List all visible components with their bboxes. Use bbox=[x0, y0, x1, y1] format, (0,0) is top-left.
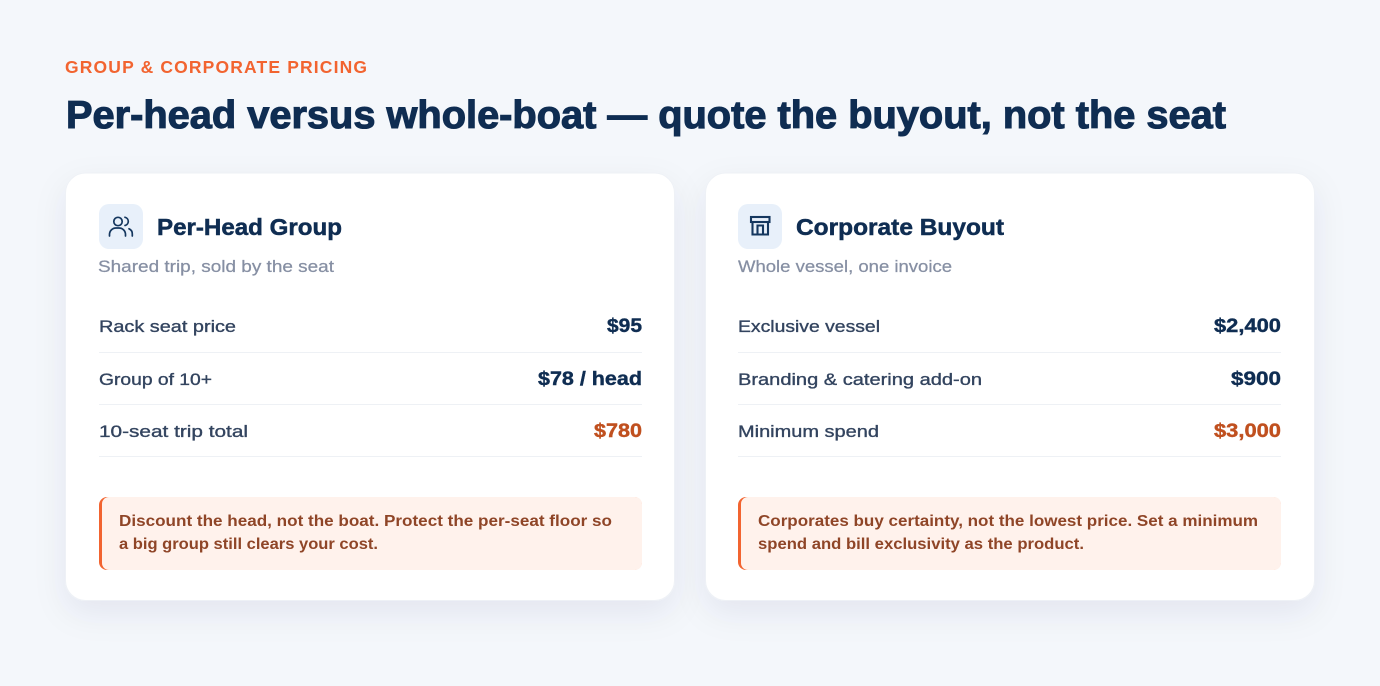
callout: Discount the head, not the boat. Protect the per-seat floor so bbox=[119, 513, 612, 530]
panel: per-head group bbox=[66, 173, 674, 600]
row: rack seat price: Rack seat price bbox=[99, 317, 236, 336]
row: exclusive vessel: Exclusive vessel bbox=[738, 317, 880, 336]
row: 10-seat trip total: 10-seat trip total bbox=[99, 422, 248, 441]
row: branding and catering: $900 bbox=[1231, 369, 1281, 390]
row: 10-seat trip total bbox=[99, 421, 642, 442]
callout bbox=[99, 497, 642, 570]
row: minimum spend bbox=[738, 421, 1281, 442]
callout: Corporates buy certainty, not the lowest price. Set a minimum bbox=[758, 513, 1258, 530]
card subtitle: Whole vessel, one invoice bbox=[738, 257, 952, 276]
row: group of 10+: $78 / head bbox=[538, 369, 642, 390]
card background bbox=[706, 173, 1314, 600]
title: Per-head versus whole-boat — quote the buyout, not the seat bbox=[66, 94, 1226, 137]
row: rack seat price: $95 bbox=[607, 316, 642, 337]
card heading: Per-Head Group bbox=[157, 214, 342, 240]
row: branding and catering: Branding & catering add-on bbox=[738, 370, 982, 389]
row: group of 10+ bbox=[99, 369, 642, 390]
row: exclusive vessel bbox=[738, 316, 1281, 337]
callout: a big group still clears your cost. bbox=[119, 536, 378, 553]
row: branding and catering bbox=[738, 369, 1281, 390]
row: minimum spend: $3,000 bbox=[1214, 421, 1281, 442]
row: minimum spend: Minimum spend bbox=[738, 422, 879, 441]
row: rack seat price bbox=[99, 316, 642, 337]
eyebrow heading: GROUP & CORPORATE PRICING bbox=[65, 57, 367, 77]
icon: storefront bbox=[738, 204, 782, 249]
card subtitle: Shared trip, sold by the seat bbox=[98, 257, 334, 276]
callout: spend and bill exclusivity as the product. bbox=[758, 536, 1084, 553]
row: 10-seat trip total: $780 bbox=[594, 421, 642, 442]
callout bbox=[738, 497, 1281, 570]
row: exclusive vessel: $2,400 bbox=[1214, 316, 1281, 337]
row: group of 10+: Group of 10+ bbox=[99, 370, 212, 389]
card background bbox=[66, 173, 674, 600]
icon: people bbox=[99, 204, 143, 249]
panel: corporate buyout bbox=[706, 173, 1314, 600]
card heading: Corporate Buyout bbox=[796, 214, 1004, 240]
